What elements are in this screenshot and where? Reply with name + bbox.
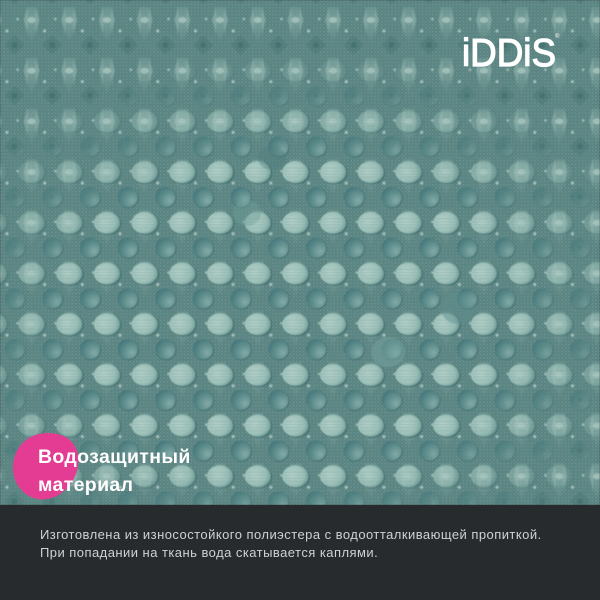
title: Водозащитный — [38, 446, 191, 468]
logo: iDDiS — [462, 32, 556, 75]
dark footer panel — [0, 505, 600, 600]
body text: Изготовлена из износостойкого полиэстера с водоотталкивающей пропиткой. — [40, 527, 542, 542]
pink blob — [13, 433, 78, 500]
title: материал — [38, 474, 133, 496]
title — [38, 446, 191, 496]
body text: При попадании на ткань вода скатывается каплями. — [40, 544, 378, 560]
body text — [40, 527, 542, 560]
logo: ® — [555, 33, 560, 40]
